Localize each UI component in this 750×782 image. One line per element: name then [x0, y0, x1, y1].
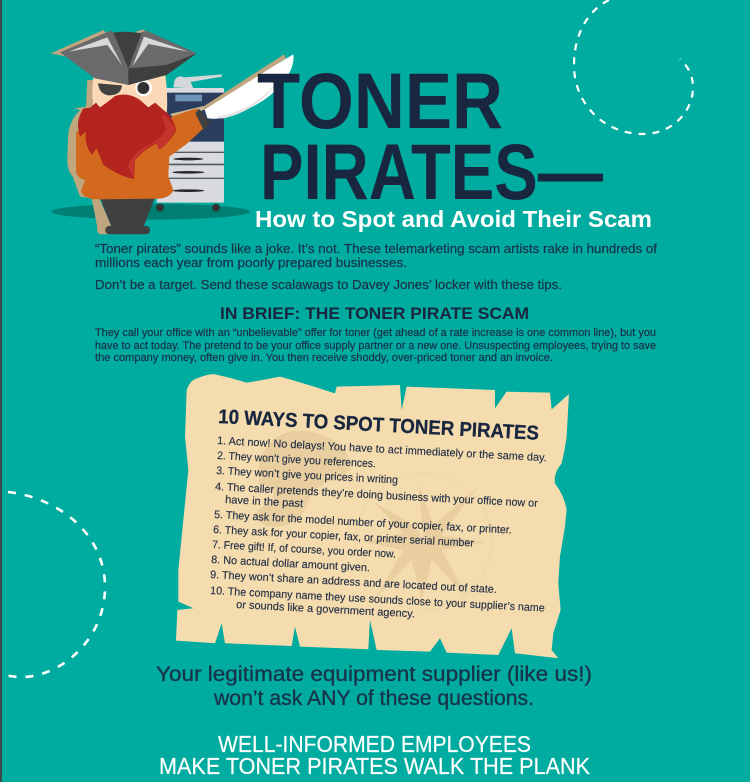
parchment list: 10. The company name they use sounds close to your supplier’s name: [210, 585, 545, 615]
intro text: [95, 241, 657, 292]
intro text: “Toner pirates” sounds like a joke. It’s not. These telemarketing scam artists rake in hundreds of: [95, 241, 657, 256]
parchment list: 8. No actual dollar amount given.: [211, 554, 370, 574]
title: TONER: [257, 56, 503, 145]
callout: legitimate supplier: [156, 663, 592, 710]
subtitle: How to Spot and Avoid Their Scam: [255, 206, 652, 232]
in brief text: [95, 327, 656, 364]
closing headline: MAKE TONER PIRATES WALK THE PLANK: [159, 753, 591, 779]
orange coat: [76, 108, 205, 199]
parchment list: 6. They ask for your copier, fax, or printer serial number: [213, 524, 474, 550]
decorative dashed swirl: left: [2, 492, 105, 677]
eye patch and eye: [98, 80, 152, 96]
intro text: Don’t be a target. Send these scalawags to Davey Jones’ locker with these tips.: [95, 277, 562, 292]
icon: sword: [170, 54, 294, 119]
title: PIRATES—: [260, 127, 603, 216]
parchment list: 7. Free gift! If, of course, you order now.: [212, 539, 396, 561]
legs and boots: [100, 197, 155, 234]
illustration: pirate with copier: [51, 29, 294, 234]
parchment list: or sounds like a government agency.: [236, 599, 415, 620]
parchment list: 4. The caller pretends they’re doing business with your office now or: [215, 481, 538, 510]
compass rose: [256, 431, 492, 610]
title: [257, 56, 603, 216]
closing headline: WELL-INFORMED EMPLOYEES: [218, 731, 531, 757]
coat cuff: [195, 109, 210, 131]
parchment list: 2. They won’t give you references.: [217, 450, 376, 470]
parchment list: 9. They won’t share an address and are located out of state.: [210, 569, 497, 596]
parchment list: 5. They ask for the model number of your copier, fax, or printer.: [214, 509, 512, 537]
parchment list: have in the past: [225, 494, 303, 510]
ground shadow: [51, 204, 250, 220]
head: [92, 72, 167, 115]
icon: office copier: [156, 74, 224, 212]
section heading: in brief: IN BRIEF: THE TONER PIRATE SCAM: [220, 304, 529, 323]
callout: legitimate supplier: Your legitimate equipment supplier (like us!): [156, 663, 592, 686]
in brief text: They call your office with an “unbelievable” offer for toner (get ahead of a rate increase is one common line), but you: [95, 327, 656, 339]
decorative dashed swirl: top right: [574, 0, 693, 134]
parchment list: 1. Act now! No delays! You have to act immediately or the same day.: [217, 435, 547, 464]
parchment heading: 10 WAYS TO SPOT TONER PIRATES: [218, 406, 539, 445]
in brief text: have to act today. The pretend to be your office supply partner or a new one. Unsuspecting employees, trying to save: [95, 340, 656, 352]
in brief text: the company money, often give in. You then receive shoddy, over-priced toner and an invoice.: [95, 352, 553, 364]
tricorn hat: [60, 31, 197, 85]
red beard: [78, 95, 176, 179]
intro text: millions each year from poorly prepared businesses.: [95, 255, 407, 270]
parchment list: [210, 435, 547, 620]
panel: parchment map: [176, 374, 569, 658]
parchment shape: [176, 374, 569, 658]
callout: legitimate supplier: won’t ask ANY of these questions.: [213, 687, 534, 710]
closing headline: [159, 731, 591, 779]
parchment list: 3. They won’t give you prices in writing: [216, 465, 398, 487]
pirate shadow: [67, 80, 112, 234]
